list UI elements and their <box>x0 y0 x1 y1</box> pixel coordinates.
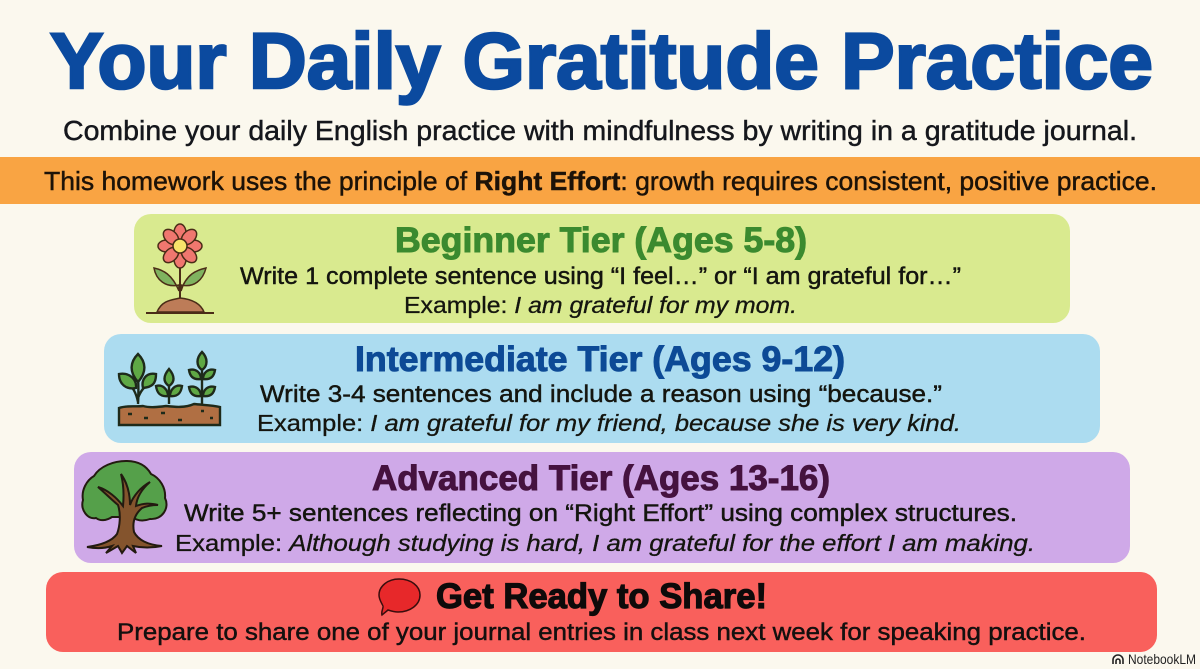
icon: speech bubble <box>379 579 420 615</box>
heading: get ready to share: Get Ready to Share! <box>436 577 767 616</box>
text: beginner example: Example: I am grateful for my mom. <box>404 292 797 318</box>
text: intermediate task: Write 3-4 sentences and include a reason using “because.” <box>260 381 942 408</box>
heading: beginner tier: Beginner Tier (Ages 5-8) <box>395 221 807 260</box>
panel: intermediate tier <box>104 334 1100 443</box>
text: advanced task: Write 5+ sentences reflecting on “Right Effort” using complex structures. <box>184 500 1017 527</box>
icon: flower <box>146 224 214 313</box>
text: advanced example: Example: Although studying is hard, I am grateful for the effort I am making. <box>175 530 1035 556</box>
banner: right effort: This homework uses the principle of Right Effort: growth requires consistent, positive practice. <box>44 166 1157 196</box>
title: Your Daily Gratitude Practice <box>50 16 1153 105</box>
panel: get ready to share <box>46 572 1157 652</box>
icon: tree <box>82 461 167 553</box>
panel: advanced tier <box>74 452 1130 563</box>
icon: seedlings <box>119 352 220 425</box>
text: share instructions: Prepare to share one of your journal entries in class next week for speaking practice. <box>117 619 1086 646</box>
text: intermediate example: Example: I am grateful for my friend, because she is very kind. <box>257 410 961 436</box>
text: beginner task: Write 1 complete sentence using “I feel…” or “I am grateful for…” <box>240 263 961 290</box>
heading: advanced tier: Advanced Tier (Ages 13-16) <box>372 459 830 498</box>
banner: right effort <box>0 157 1200 204</box>
panel: beginner tier <box>134 214 1070 323</box>
heading: intermediate tier: Intermediate Tier (Ages 9-12) <box>355 340 845 379</box>
subtitle: Combine your daily English practice with mindfulness by writing in a gratitude journal. <box>63 115 1137 146</box>
